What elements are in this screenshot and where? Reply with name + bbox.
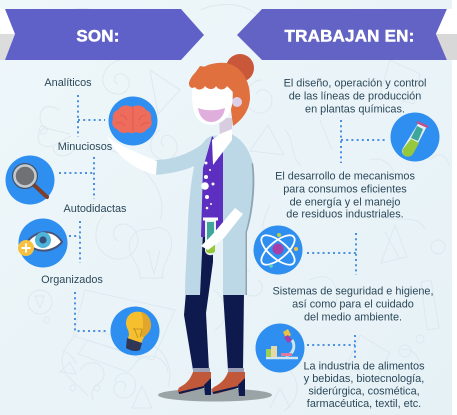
text: mecanismos: El desarrollo de mecanismos bbox=[275, 170, 415, 182]
neck bbox=[219, 118, 232, 138]
text: industria: farmacéutica, textil, etc. bbox=[307, 398, 421, 410]
icon: microscope bbox=[256, 324, 304, 372]
text: diseño: El diseño, operación y control bbox=[284, 78, 426, 90]
text: seguridad: así como para el cuidado bbox=[292, 298, 414, 310]
left arm and sleeve bbox=[155, 136, 212, 175]
connector: Minuciosos to Autodidactas bbox=[59, 157, 94, 199]
text: seguridad: del medio ambiente. bbox=[304, 312, 402, 324]
test tube in hand bbox=[203, 219, 218, 255]
text: mecanismos: de energía y el manejo bbox=[290, 196, 400, 208]
coat bbox=[185, 134, 254, 295]
fringe bbox=[189, 66, 236, 92]
text: diseño: en plantas químicas. bbox=[305, 104, 405, 116]
shadow bbox=[158, 388, 272, 402]
icon: brain bbox=[108, 96, 158, 146]
collar bbox=[212, 129, 232, 165]
label: Minuciosos: Minuciosos bbox=[58, 141, 113, 153]
text: mecanismos: para consumos eficientes bbox=[283, 184, 407, 196]
vest dots bbox=[201, 162, 214, 209]
legs bbox=[184, 236, 244, 370]
face bbox=[192, 84, 233, 125]
ribbon: SON bbox=[0, 9, 204, 60]
text: seguridad: Sistemas de seguridad e higiene, bbox=[272, 286, 434, 298]
label: Organizados: Organizados bbox=[41, 274, 103, 286]
icon: atom bbox=[254, 226, 302, 274]
icon: magnifier bbox=[6, 156, 54, 204]
figure: chemical engineer bbox=[107, 54, 272, 402]
ear bbox=[232, 97, 242, 107]
mouth bbox=[198, 108, 225, 122]
label: Autodidactas: Autodidactas bbox=[64, 203, 127, 215]
label: Analíticos: Analíticos bbox=[44, 77, 92, 89]
icon: eye with plus bbox=[18, 218, 68, 268]
icon: test tube bbox=[390, 112, 440, 162]
ribbon: TRABAJAN EN bbox=[237, 9, 457, 60]
connector: atom to seguridad bbox=[307, 233, 356, 275]
right hand bbox=[201, 208, 243, 250]
text: industria: siderúrgica, cosmética, bbox=[308, 386, 420, 398]
text: industria: y bebidas, biotecnología, bbox=[304, 373, 424, 385]
connector: Analíticos to Minuciosos bbox=[78, 95, 105, 137]
text: diseño: de las líneas de producción bbox=[289, 90, 421, 102]
connector: Autodidactas to Organizados bbox=[69, 221, 80, 263]
bun bbox=[226, 54, 254, 82]
connector: diseño to test tube bbox=[341, 120, 387, 163]
hair bbox=[190, 63, 250, 126]
text: industria: La industria de alimentos bbox=[303, 360, 425, 372]
icon: light bulb bbox=[110, 306, 160, 356]
text: mecanismos: de residuos industriales. bbox=[286, 208, 404, 220]
heading: TRABAJAN EN: TRABAJAN EN: bbox=[285, 26, 414, 46]
heading: SON: SON: bbox=[76, 26, 120, 46]
connector: microscope to industria bbox=[307, 335, 355, 358]
connector: Organizados to light bulb bbox=[75, 292, 106, 331]
vest bbox=[201, 136, 223, 237]
boots bbox=[178, 372, 245, 396]
